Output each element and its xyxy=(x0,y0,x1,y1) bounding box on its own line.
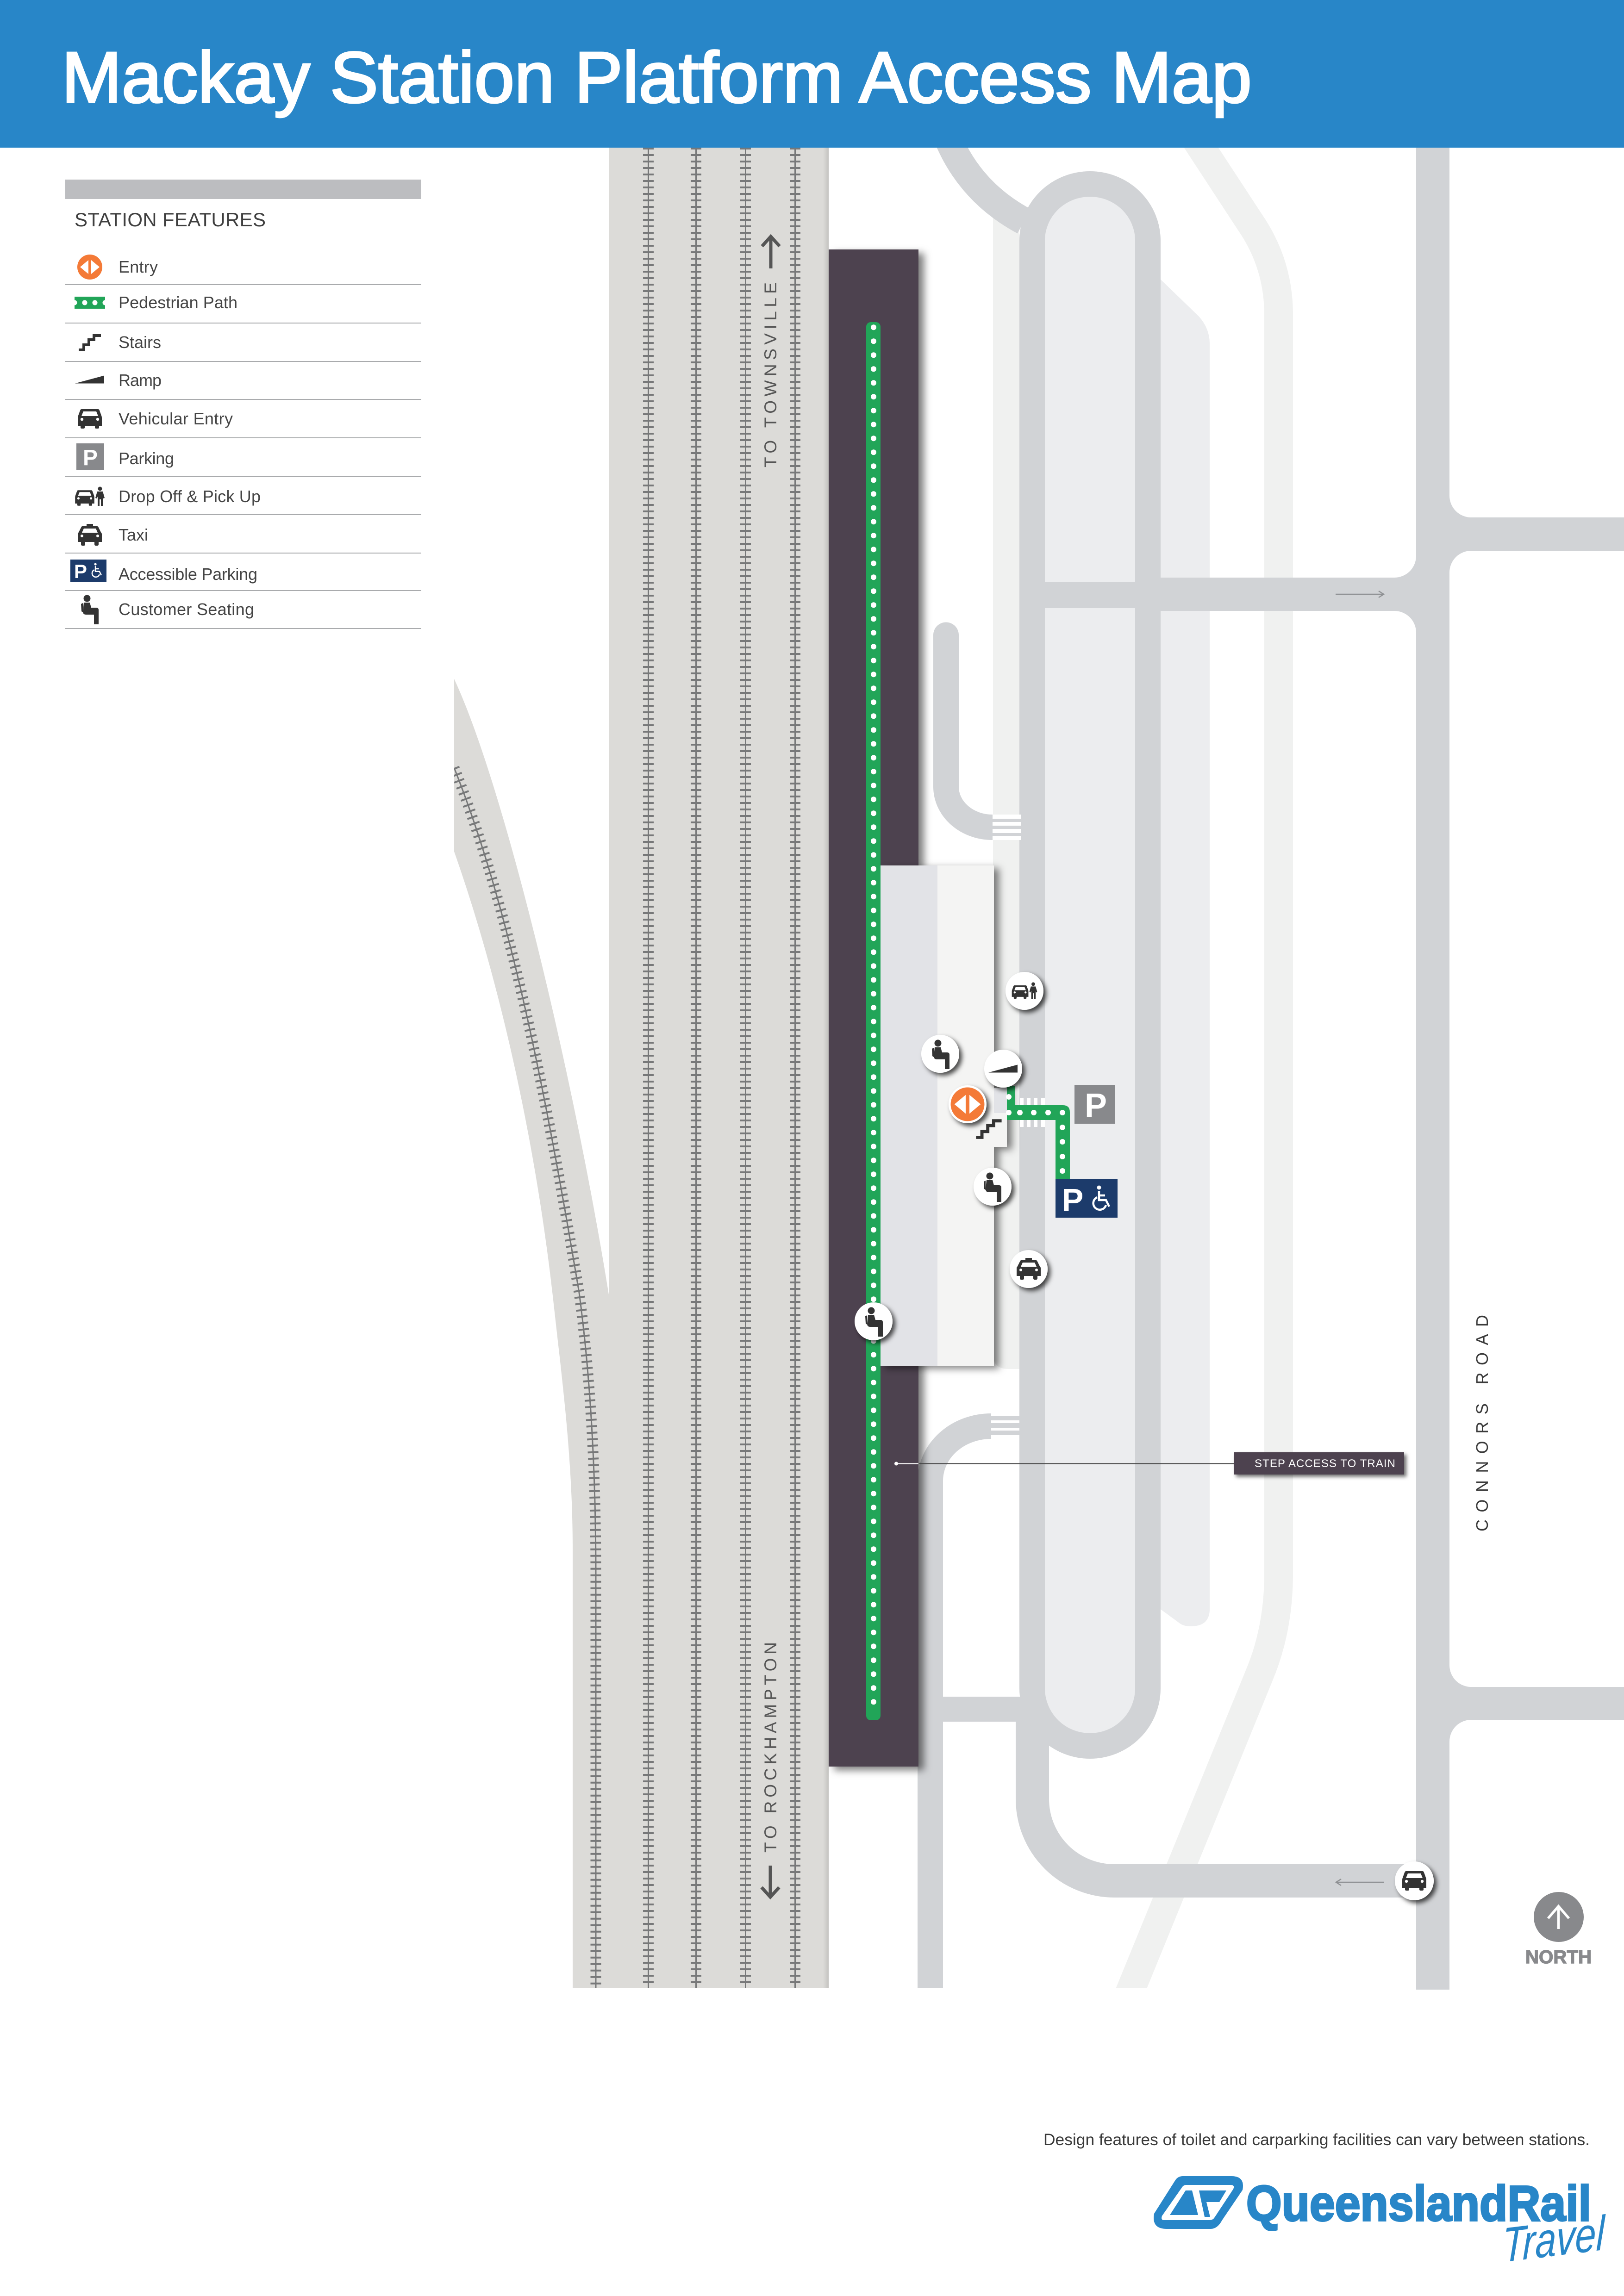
legend panel: station features xyxy=(65,180,421,628)
legend item: vehicular entry: Vehicular Entry xyxy=(119,409,233,428)
direction label: to Townsville: TO TOWNSVILLE xyxy=(761,282,780,467)
pedestrian footpaths, light xyxy=(993,137,1279,2004)
icon: entry xyxy=(949,1085,987,1123)
legend item: entry xyxy=(77,255,158,280)
icon: customer seating south xyxy=(974,1168,1012,1206)
pedestrian path to parking xyxy=(1006,1086,1070,1179)
upper crossing xyxy=(993,815,1021,840)
legend item: accessible parking: Accessible Parking xyxy=(119,565,257,584)
car park extension area xyxy=(1157,276,1210,1626)
station building xyxy=(880,865,1007,1366)
legend item: ramp: Ramp xyxy=(119,371,162,390)
legend item: customer seating xyxy=(81,595,254,624)
north indicator xyxy=(1525,1892,1592,1967)
legend item: parking: P xyxy=(83,446,98,470)
side roads east of Connors Road xyxy=(1449,517,1624,1720)
cross road xyxy=(1157,578,1416,611)
legend item: customer seating: Customer Seating xyxy=(119,600,254,619)
road direction arrow, east xyxy=(1336,591,1384,597)
legend item: stairs: Stairs xyxy=(119,333,161,352)
legend item: ramp xyxy=(75,371,162,390)
forecourt crossing ticks xyxy=(1020,1098,1045,1127)
loop cross link xyxy=(1042,582,1139,608)
icon: customer seating on platform xyxy=(855,1302,893,1340)
legend item: accessible parking xyxy=(70,560,257,584)
lower access road xyxy=(1032,1722,1417,1881)
logo mark xyxy=(1154,2176,1243,2229)
icon: parking sign xyxy=(1074,1085,1115,1124)
Connors Road label: CONNORS ROAD xyxy=(1473,1315,1492,1531)
disclaimer: Design features of toilet and carparking facilities can vary between stations. xyxy=(1043,2131,1590,2149)
road direction arrow, west xyxy=(1336,1879,1384,1885)
icon: stairs xyxy=(976,1121,1002,1137)
upper service road xyxy=(946,635,993,828)
legend item: parking xyxy=(76,443,174,470)
icon: customer seating north xyxy=(921,1035,959,1073)
icon: parking sign: P xyxy=(1085,1087,1107,1124)
road network xyxy=(930,137,1624,1990)
north indicator: NORTH xyxy=(1525,1947,1592,1967)
legend item: entry: Entry xyxy=(119,257,158,276)
legend item: accessible parking: P xyxy=(74,560,87,582)
callout: step access to train xyxy=(894,1452,1404,1475)
logo: Queensland Rail Travel xyxy=(1154,2175,1606,2273)
Connors Road xyxy=(1394,148,1471,1990)
legend item: taxi xyxy=(78,524,148,546)
platform xyxy=(829,249,918,1767)
icon: taxi xyxy=(1010,1250,1048,1288)
logo wordmark: QueenslandRail xyxy=(1246,2175,1591,2231)
legend header bar xyxy=(65,180,421,199)
icon: accessible parking sign: P xyxy=(1062,1182,1083,1218)
north-west curved road xyxy=(947,137,1024,221)
rail corridor with tracks xyxy=(454,148,829,1988)
legend item: drop off and pick up: Drop Off & Pick Up xyxy=(119,487,261,506)
direction label: to Rockhampton: TO ROCKHAMPTON xyxy=(761,1642,780,1853)
header banner xyxy=(0,0,1624,148)
icon: accessible parking sign xyxy=(1056,1179,1118,1218)
legend heading: STATION FEATURES xyxy=(75,209,266,230)
legend item: stairs xyxy=(79,333,161,352)
lower crossing xyxy=(991,1416,1020,1435)
western service road xyxy=(930,1426,991,1988)
legend item: parking: Parking xyxy=(119,449,174,468)
title: Mackay Station Platform Access Map xyxy=(62,37,1252,118)
callout: step access to train: STEP ACCESS TO TRAIN xyxy=(1255,1457,1395,1470)
icon: drop off and pick up xyxy=(1006,972,1043,1010)
icon: ramp xyxy=(984,1050,1022,1088)
icon: vehicular entry xyxy=(1395,1861,1434,1900)
legend item: pedestrian path: Pedestrian Path xyxy=(119,293,237,312)
legend item: taxi: Taxi xyxy=(119,525,148,544)
platform pedestrian path xyxy=(866,322,881,1720)
branch to lower road xyxy=(940,1697,1037,1722)
forecourt loop road xyxy=(1032,184,1148,1746)
